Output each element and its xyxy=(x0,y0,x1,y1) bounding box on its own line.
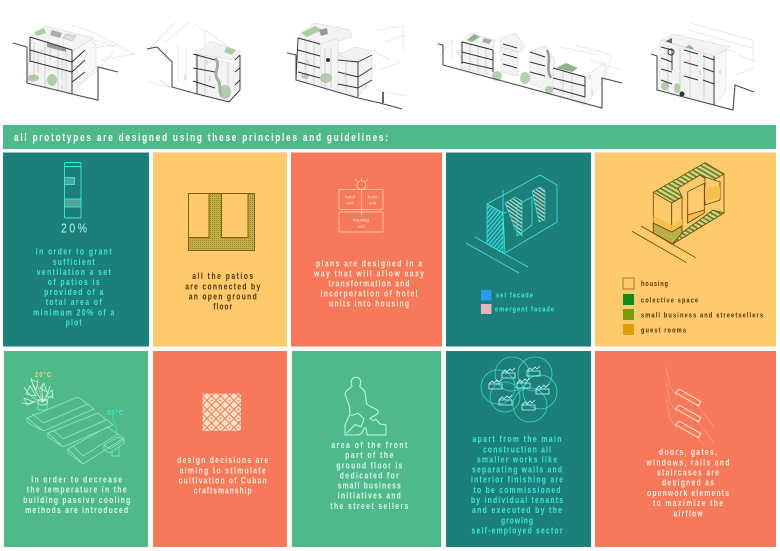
text block: area of the front xyxy=(331,440,408,450)
figure: 20%: 20% xyxy=(61,221,87,236)
icon: hotel and housing units: hotel xyxy=(368,194,377,200)
text block: the temperature in the xyxy=(27,485,127,495)
text block: doors, gates, xyxy=(659,447,717,457)
text block: ventilation a set xyxy=(37,267,111,277)
legend: facade types: set facade xyxy=(496,292,533,300)
text block: openwork elements xyxy=(647,488,729,498)
text block xyxy=(185,271,261,312)
icon: overlapping toolboxes xyxy=(481,357,557,422)
text block: initiatives and xyxy=(338,491,401,501)
icon: patio plan xyxy=(188,194,254,250)
icon: isometric massing xyxy=(466,175,557,273)
text block: growing xyxy=(501,515,533,526)
legend: facade types: emergent facade xyxy=(495,306,554,314)
text block: design decisions are xyxy=(177,455,269,465)
text block: dedicated for xyxy=(340,470,399,481)
text block: sufficient xyxy=(53,257,95,267)
text block: total area of xyxy=(46,297,102,307)
text block: small business xyxy=(338,481,401,491)
text block: all the patios xyxy=(192,271,254,281)
text block: craftsmanship xyxy=(194,486,252,496)
text block: designed as xyxy=(662,478,714,488)
text block: ground floor is xyxy=(336,460,403,471)
text block: staircases are xyxy=(657,468,720,478)
text block: of patios is xyxy=(48,277,100,287)
text block: part of the xyxy=(345,450,394,460)
icon: cooling channels with plant xyxy=(22,370,124,464)
drawing: prototype section 2 xyxy=(147,22,241,102)
text block: plans are designed in a xyxy=(316,258,422,269)
text block: floor xyxy=(213,302,232,312)
icon: hotel and housing units xyxy=(339,178,383,232)
text block: smaller works like xyxy=(477,454,558,465)
icon: woven pattern xyxy=(202,394,241,431)
header banner xyxy=(3,125,776,149)
text block: the street sellers xyxy=(330,501,409,511)
text block: apart from the main xyxy=(472,434,562,444)
text block: provided of a xyxy=(44,287,104,297)
text block: building passive cooling xyxy=(23,495,130,505)
text block: separating walls and xyxy=(472,465,562,475)
text block: construction all xyxy=(483,444,551,455)
panel: connected patios xyxy=(153,152,287,346)
text block xyxy=(471,434,564,536)
text block: self-employed sector xyxy=(472,525,562,536)
text block: in order to decrease xyxy=(31,474,123,485)
drawing: prototype section 4 xyxy=(438,33,622,108)
text block: interior finishing are xyxy=(471,475,564,485)
text block xyxy=(646,447,730,519)
text block: incorporation of hotel xyxy=(321,289,417,299)
text block xyxy=(33,247,115,328)
icon: hotel and housing units: housing xyxy=(353,218,369,222)
text block: plot xyxy=(66,318,82,328)
text block: in order to grant xyxy=(36,247,112,257)
drawing: prototype section 5 xyxy=(651,23,756,110)
panel: hotel units xyxy=(291,152,442,346)
text block: transformation and xyxy=(328,278,410,289)
legend: programme: guest rooms xyxy=(641,327,686,335)
legend: programme: small business and streetsellers xyxy=(641,312,763,320)
icon: hotel and housing units: hotel xyxy=(345,194,355,200)
text block: to maximize the xyxy=(653,498,723,508)
icon: hotel and housing units: unit xyxy=(346,200,354,206)
legend: programme: colective space xyxy=(641,297,698,305)
legend: programme: housing xyxy=(641,280,668,288)
legend: facade types xyxy=(481,290,554,314)
text block xyxy=(23,474,130,515)
icon: seated seller xyxy=(345,377,386,435)
panel: openwork elements xyxy=(595,351,776,547)
text block: and executed by the xyxy=(472,505,562,515)
text block xyxy=(330,440,409,511)
icon: cooling channels with plant: 20°C xyxy=(35,370,51,379)
text block: windows, rails and xyxy=(646,457,730,468)
text block: aiming to stimulate xyxy=(180,465,266,476)
panel: craftsmanship xyxy=(153,351,287,547)
drawing: prototype section 3 xyxy=(287,23,407,109)
panel: facades xyxy=(446,152,591,346)
text block xyxy=(313,258,425,309)
icon: isometric programme xyxy=(632,163,724,263)
panel: passive cooling xyxy=(4,351,148,547)
text block: an open ground xyxy=(189,292,257,302)
text block: cultivation of Cuban xyxy=(179,475,267,486)
panel: ventilation patios xyxy=(3,152,149,346)
icon: cooling channels with plant: 35°C xyxy=(107,408,123,417)
text block: methods are introduced xyxy=(25,505,128,515)
text block: airflow xyxy=(673,508,703,519)
text block: way that will allow easy xyxy=(313,268,425,279)
text block: units into housing xyxy=(329,299,409,309)
drawing: prototype section 1 xyxy=(13,25,135,100)
icon: plot with patios xyxy=(64,162,81,218)
panel: programme massing xyxy=(595,152,776,346)
icon: hotel and housing units: unit xyxy=(357,224,365,229)
panel: street sellers xyxy=(292,351,441,547)
legend: programme xyxy=(623,278,763,335)
text block: to be commissioned xyxy=(473,485,561,495)
text block: by individual tenants xyxy=(471,495,564,505)
text block: are connected by xyxy=(185,281,261,292)
panel: self-employed sector xyxy=(446,351,591,547)
text block: minimum 20% of a xyxy=(33,307,115,318)
icon: hotel and housing units: unit xyxy=(369,200,377,206)
icon: airflow through openwork xyxy=(666,367,714,445)
heading: all prototypes are designed using these principles and guidelines: xyxy=(14,132,388,144)
text block xyxy=(177,455,269,496)
